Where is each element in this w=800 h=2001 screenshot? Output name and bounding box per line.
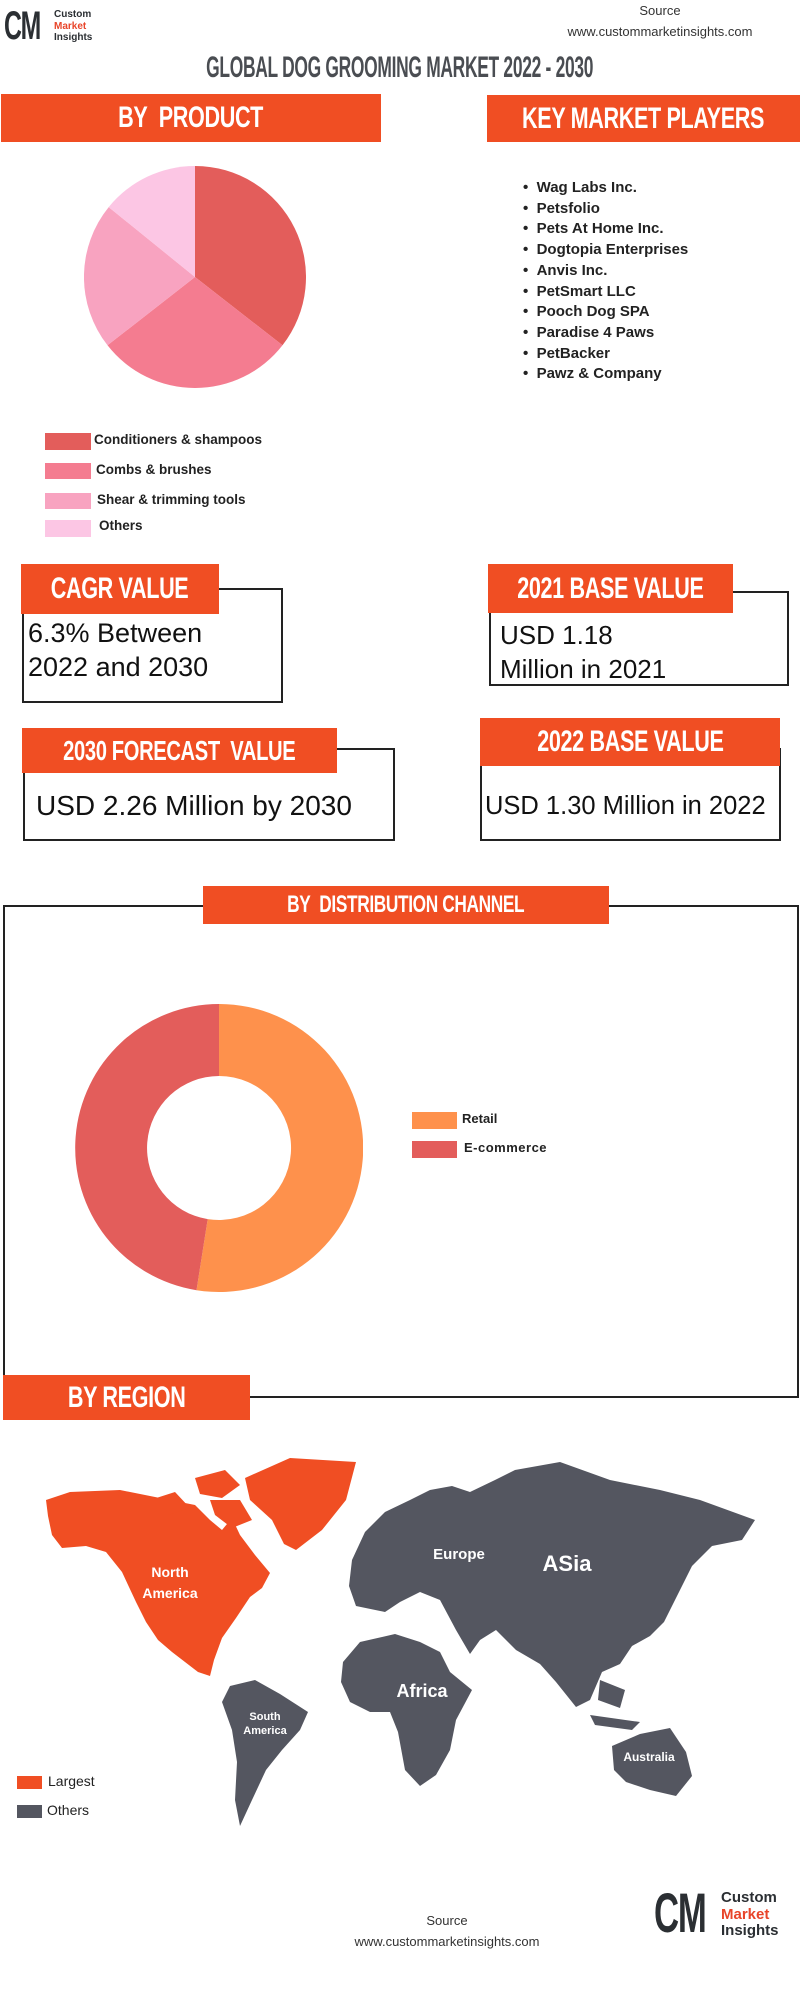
list: key market players: • Paradise 4 Paws: [523, 324, 654, 341]
heading: key market players: KEY MARKET PLAYERS: [523, 102, 764, 134]
region: europe & asia: [349, 1462, 755, 1730]
list: key market players: • PetSmart LLC: [523, 283, 636, 300]
list: key market players: • Wag Labs Inc.: [523, 179, 637, 196]
panel: 2021 base value: Million in 2021: [500, 654, 666, 684]
map labels: Australia: [623, 1750, 675, 1764]
region: australia: [612, 1728, 692, 1796]
source bottom: Source: [426, 1913, 468, 1928]
map labels: America: [243, 1725, 288, 1737]
panel: 2021 base value: USD 1.18: [500, 620, 613, 650]
panel: cagr: [21, 564, 283, 703]
title: GLOBAL DOG GROOMING MARKET 2022 - 2030: [206, 51, 594, 84]
logo top: Custom: [54, 9, 91, 20]
pie chart: by product: [84, 166, 306, 388]
heading: by product: BY PRODUCT: [119, 101, 263, 134]
map labels: ASia: [543, 1551, 592, 1576]
logo bottom: [654, 1881, 779, 1944]
panel: cagr: 6.3% Between: [28, 618, 202, 648]
panel: 2030 forecast: [22, 728, 395, 841]
logo bottom: Market: [721, 1906, 769, 1922]
world map: [46, 1458, 755, 1826]
panel: 2030 forecast: USD 2.26 Million by 2030: [36, 790, 352, 821]
donut chart: [75, 1004, 363, 1292]
source top: www.custommarketinsights.com: [568, 24, 752, 39]
panel: 2021 base value: 2021 BASE VALUE: [517, 572, 704, 604]
legend: distribution: E-commerce: [464, 1140, 547, 1155]
list: key market players: • Anvis Inc.: [523, 262, 607, 279]
logo top: CM: [4, 4, 40, 48]
legend: region: Largest: [48, 1773, 95, 1789]
logo top: [4, 4, 92, 48]
heading: by region: BY REGION: [68, 1380, 185, 1414]
panel: 2022 base value: USD 1.30 Million in 2022: [485, 792, 766, 820]
logo top: Market: [54, 20, 86, 32]
legend: product: Combs & brushes: [96, 462, 212, 477]
legend: distribution: [412, 1111, 547, 1158]
map labels: South: [249, 1711, 281, 1723]
logo bottom: CM: [654, 1881, 706, 1944]
panel: 2030 forecast: 2030 FORECAST VALUE: [63, 734, 296, 766]
list: key market players: • Petsfolio: [523, 200, 600, 217]
logo bottom: Insights: [721, 1922, 779, 1939]
logo bottom: Custom: [721, 1889, 777, 1906]
list: key market players: • Pawz & Company: [523, 365, 662, 382]
legend: product: Shear & trimming tools: [97, 492, 246, 507]
list: key market players: • Dogtopia Enterprises: [523, 241, 688, 258]
heading: by distribution channel: [203, 886, 609, 924]
panel: cagr: CAGR VALUE: [51, 572, 189, 605]
heading: by product: [1, 94, 381, 142]
logo top: Insights: [54, 32, 92, 43]
region: south america: [222, 1680, 308, 1826]
list: key market players: • PetBacker: [523, 345, 610, 362]
legend: product: Conditioners & shampoos: [94, 432, 262, 447]
source top: [568, 3, 752, 39]
source top: Source: [639, 3, 681, 18]
panel: 2021 base value: [488, 564, 789, 686]
list: key market players: • Pooch Dog SPA: [523, 303, 650, 320]
map labels: America: [142, 1585, 198, 1601]
map labels: Africa: [396, 1681, 448, 1701]
map labels: Europe: [433, 1546, 485, 1563]
region: africa: [341, 1634, 472, 1786]
list: key market players: • Pets At Home Inc.: [523, 220, 664, 237]
heading: by distribution channel: BY DISTRIBUTION CHANNEL: [287, 891, 525, 918]
heading: by region: [3, 1375, 250, 1420]
source bottom: www.custommarketinsights.com: [355, 1934, 539, 1949]
region: north america: [46, 1458, 356, 1676]
legend: distribution: Retail: [462, 1111, 497, 1126]
heading: key market players: [487, 95, 800, 142]
source bottom: [354, 1913, 539, 1949]
list: key market players: [523, 179, 688, 382]
legend: product: [45, 432, 262, 537]
panel: cagr: 2022 and 2030: [28, 652, 208, 682]
map labels: [142, 1546, 675, 1764]
legend: region: [17, 1773, 95, 1818]
panel: 2022 base value: [480, 718, 781, 841]
panel: 2022 base value: 2022 BASE VALUE: [537, 725, 723, 758]
panel: distribution channel: [3, 886, 799, 1398]
legend: region: Others: [47, 1802, 89, 1818]
map labels: North: [151, 1564, 189, 1580]
legend: product: Others: [99, 518, 143, 533]
